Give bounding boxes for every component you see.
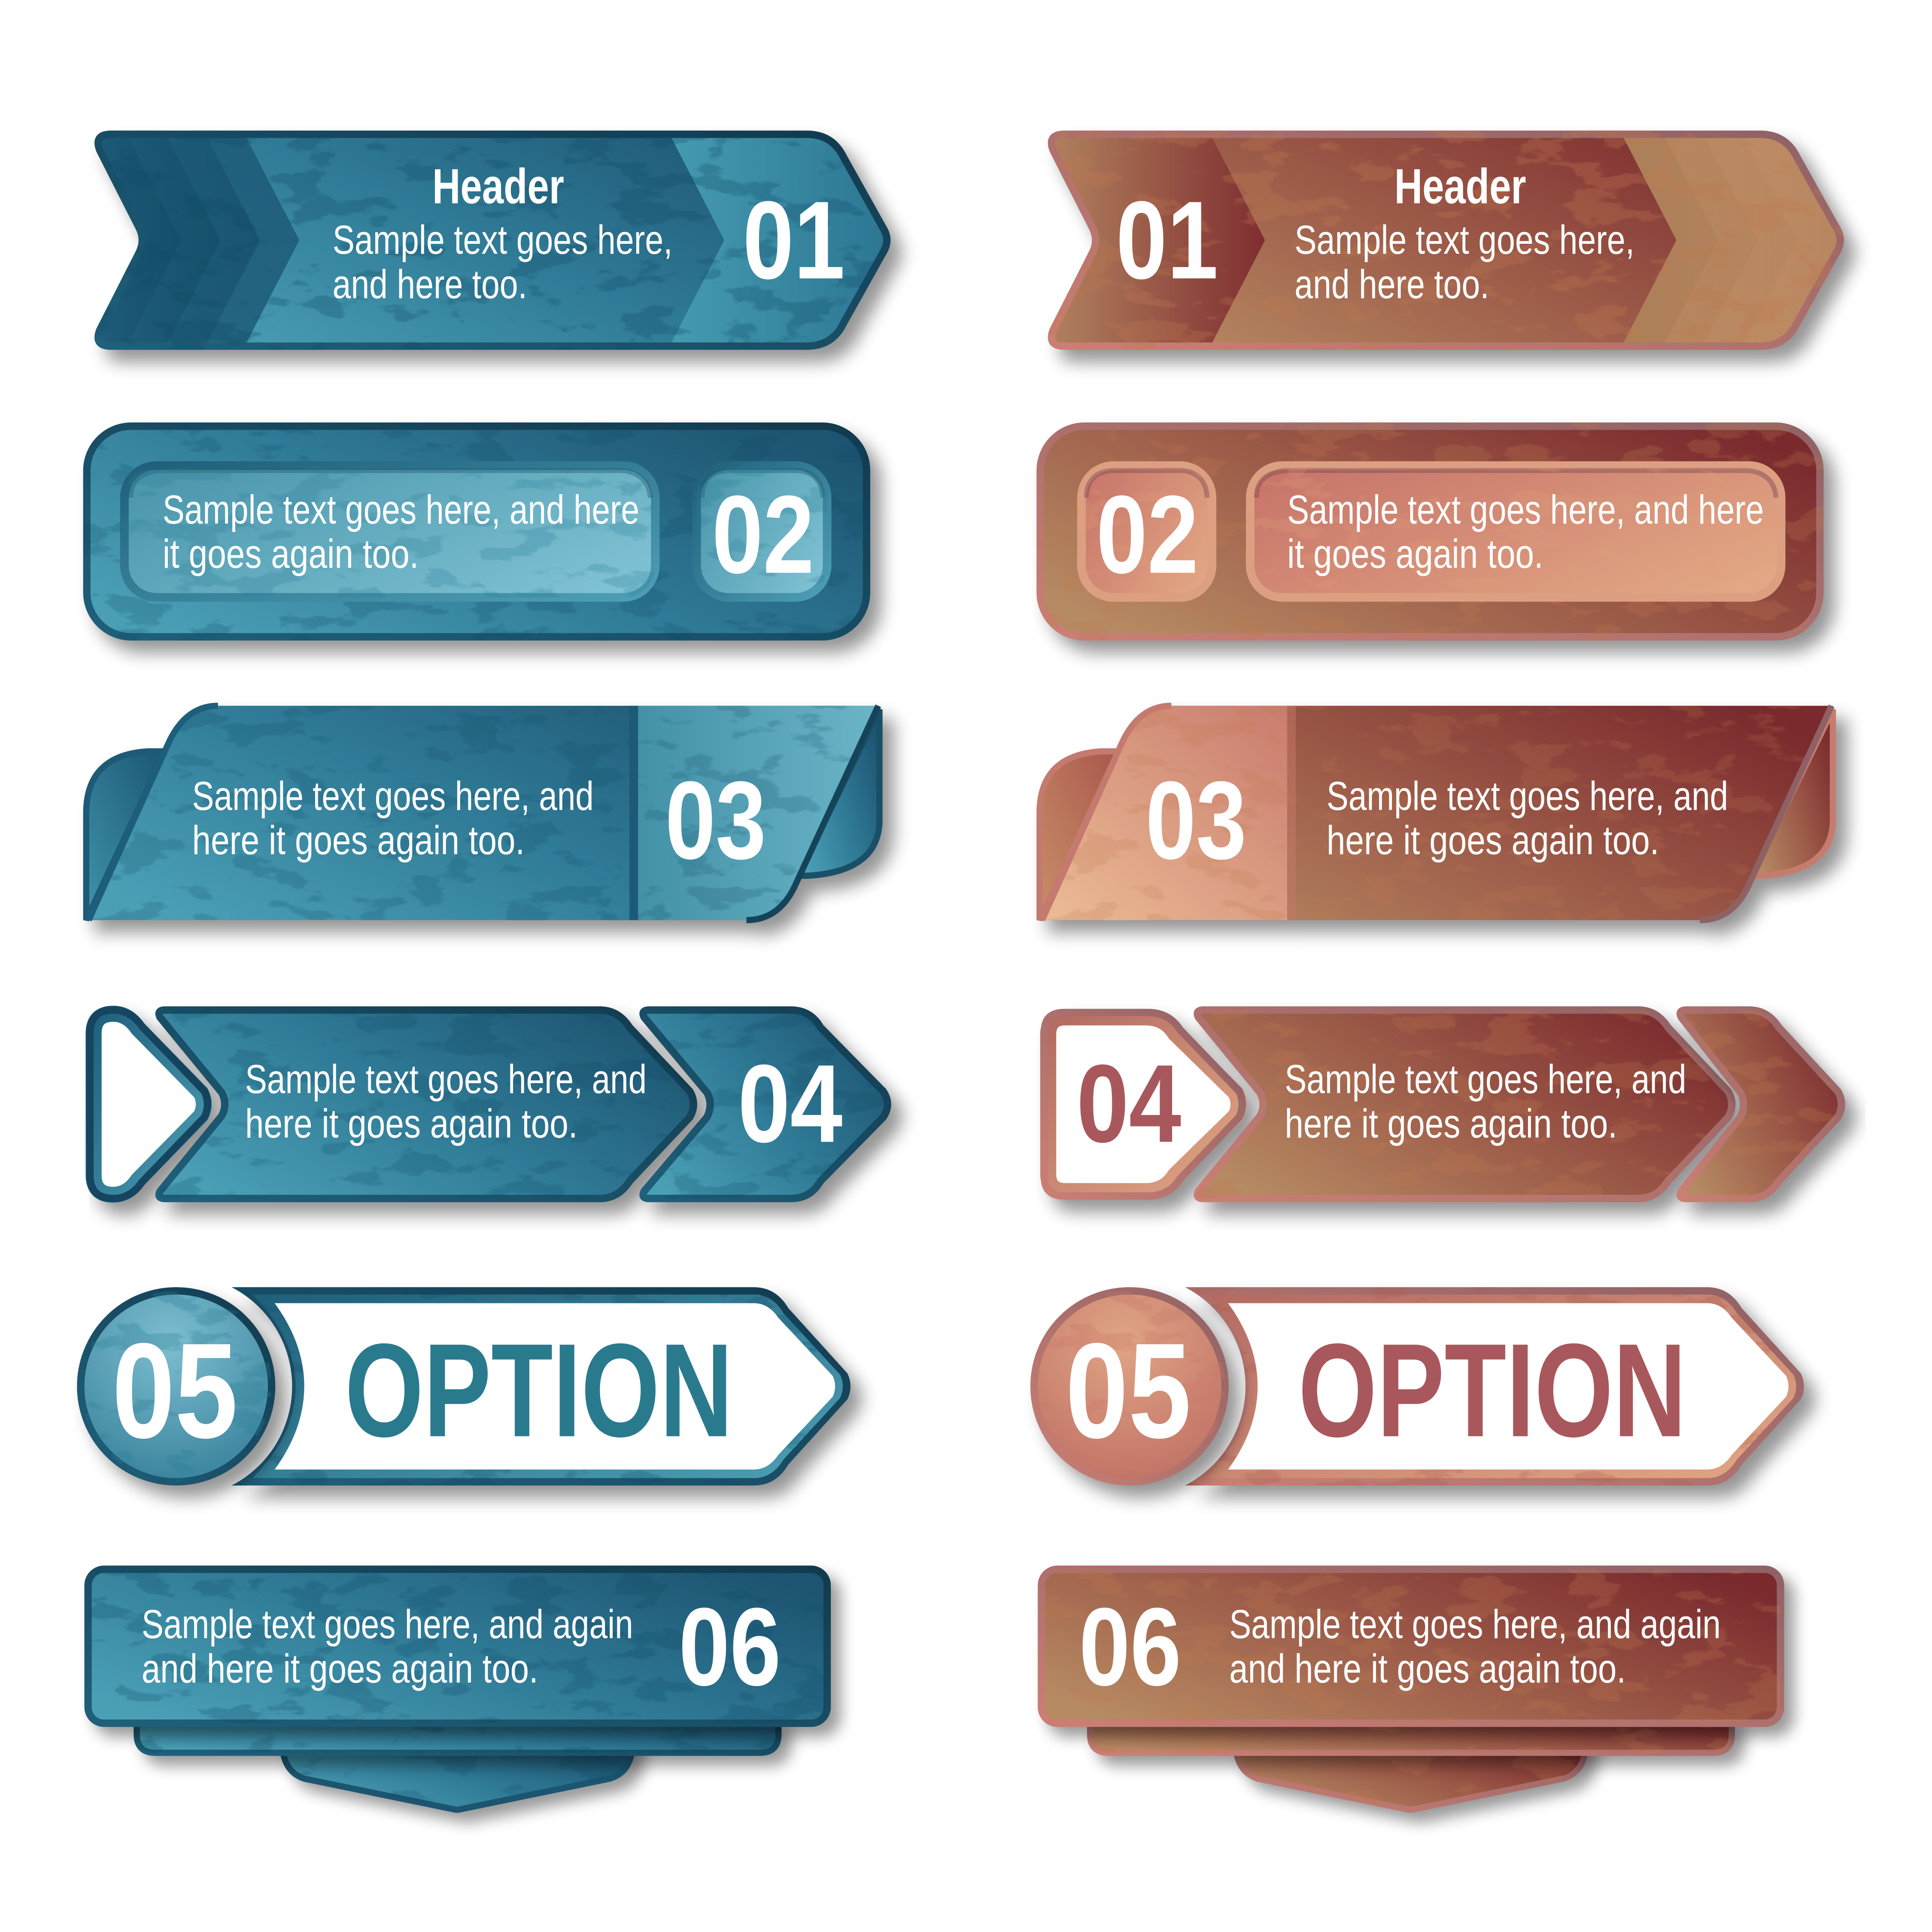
number 02: 02 <box>712 472 814 596</box>
body text: Sample text goes here, and again <box>1229 1602 1721 1647</box>
body text: Sample text goes here, and <box>192 773 594 819</box>
body text <box>333 217 672 307</box>
panel: red banner 04 <box>1045 1010 1841 1199</box>
body text: Sample text goes here, and here <box>1287 487 1764 532</box>
body text <box>1285 1057 1686 1147</box>
panel: red banner 05 <box>1034 1287 1804 1485</box>
rounded card 02 <box>87 426 866 637</box>
option arrow band <box>231 1287 851 1485</box>
number well <box>1081 465 1212 597</box>
option label: OPTION <box>1298 1316 1686 1464</box>
small arrow <box>643 1010 887 1199</box>
panel: blue banner 01 <box>74 123 911 357</box>
pointed tab <box>283 1738 632 1810</box>
middle tab <box>1090 1719 1732 1753</box>
rounded card 02 red <box>1040 426 1820 637</box>
number 01: 01 <box>743 178 845 302</box>
option label: OPTION <box>345 1316 733 1464</box>
body text: here it goes again too. <box>192 818 525 863</box>
number 06: 06 <box>1079 1585 1181 1709</box>
panel: red banner 01 <box>1027 123 1865 357</box>
body text: Sample text goes here, and here <box>163 487 639 532</box>
number 04: 04 <box>738 1042 843 1166</box>
panel: red banner 03 <box>1039 706 1833 920</box>
main card <box>1042 1569 1780 1723</box>
panel: blue banner 04 <box>90 1010 887 1199</box>
panel: red banner 06 <box>1042 1569 1780 1810</box>
number 04: 04 <box>1076 1042 1182 1166</box>
number 01: 01 <box>1116 178 1218 302</box>
body text <box>1287 487 1764 577</box>
body text: here it goes again too. <box>245 1101 578 1147</box>
body text <box>192 773 594 863</box>
panel: blue banner 02 <box>87 426 866 637</box>
circle badge <box>81 1291 272 1482</box>
body text: Sample text goes here, and again <box>142 1602 633 1647</box>
number 02: 02 <box>1096 472 1199 596</box>
body text: and here too. <box>333 261 527 307</box>
chevron arrow shape 01 red <box>1027 123 1865 357</box>
body text: and here it goes again too. <box>142 1646 538 1692</box>
number well <box>696 465 827 597</box>
body text: here it goes again too. <box>1285 1101 1617 1147</box>
body text: Sample text goes here, <box>1294 217 1634 263</box>
number 05: 05 <box>112 1315 238 1466</box>
body text <box>1229 1602 1721 1692</box>
white tag <box>90 1010 207 1199</box>
body text: it goes again too. <box>163 532 419 577</box>
panel: blue banner 06 <box>88 1569 827 1810</box>
folded ribbon 03 red <box>1039 706 1833 920</box>
body text <box>245 1057 647 1147</box>
number 06: 06 <box>679 1585 781 1709</box>
number 05: 05 <box>1066 1315 1191 1466</box>
body text <box>163 487 639 577</box>
body text: and here too. <box>1294 261 1489 307</box>
middle tab <box>137 1719 778 1753</box>
body text: Sample text goes here, and <box>1285 1057 1686 1102</box>
main arrow <box>159 1010 693 1199</box>
body text <box>142 1602 633 1692</box>
small arrow <box>1680 1010 1841 1199</box>
body text <box>1294 217 1634 307</box>
number 03: 03 <box>1145 758 1246 882</box>
body text: and here it goes again too. <box>1229 1646 1626 1692</box>
pointed tab <box>1236 1738 1585 1810</box>
text well <box>1250 465 1781 597</box>
body text: it goes again too. <box>1287 532 1543 577</box>
panel: red banner 02 <box>1040 426 1820 637</box>
text well <box>125 465 655 597</box>
folded ribbon 03 <box>86 706 879 920</box>
number 03: 03 <box>665 758 766 882</box>
body text: Sample text goes here, and <box>245 1057 647 1102</box>
header: Header <box>432 159 564 214</box>
main arrow <box>1197 1010 1732 1199</box>
circle badge <box>1034 1291 1225 1482</box>
chevron arrow shape 01 <box>74 123 911 357</box>
panel: blue banner 05 <box>81 1287 851 1485</box>
main card <box>88 1569 827 1723</box>
body text: Sample text goes here, and <box>1327 773 1728 819</box>
option arrow band <box>1185 1287 1804 1485</box>
body text <box>1327 773 1728 863</box>
body text: here it goes again too. <box>1327 818 1659 863</box>
header: Header <box>1394 159 1526 214</box>
panel: blue banner 03 <box>86 706 879 920</box>
body text: Sample text goes here, <box>333 217 672 263</box>
white pentagon tag <box>1045 1012 1242 1196</box>
